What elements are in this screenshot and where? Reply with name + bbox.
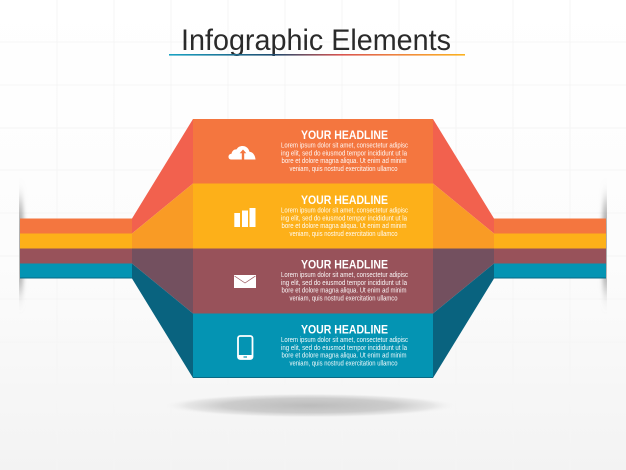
title underline: [169, 54, 465, 56]
icon: cloud upload: [228, 146, 256, 160]
right band fold shadow: [602, 198, 610, 294]
panel 4: teal: [193, 314, 433, 378]
body text 4: ing elit, sed do eiusmod tempor incididunt ut la: [281, 345, 407, 352]
body text 2: [281, 208, 408, 238]
body text 4: [281, 337, 408, 367]
body text 2: veniam, quis nostrud exercitation ullamco: [290, 231, 398, 238]
body text 3: veniam, quis nostrud exercitation ullamco: [290, 295, 398, 302]
left angled folds: [132, 119, 193, 378]
body text 1: bore et dolore magna aliqua. Ut enim ad minim: [282, 158, 407, 165]
icon: smartphone: [238, 336, 252, 359]
headline 2: YOUR HEADLINE: [301, 195, 388, 207]
body text 3: Lorem ipsum dolor sit amet, consectetur adipisc: [281, 272, 408, 279]
body text 4: veniam, quis nostrud exercitation ullamco: [290, 360, 398, 367]
panel 2: yellow: [193, 184, 433, 248]
panel 3: maroon: [193, 248, 433, 314]
icon: envelope: [234, 275, 256, 288]
ground shadow: [165, 394, 455, 418]
body text 2: ing elit, sed do eiusmod tempor incididunt ut la: [281, 215, 407, 222]
headline 3: YOUR HEADLINE: [301, 260, 388, 272]
body text 4: Lorem ipsum dolor sit amet, consectetur adipisc: [281, 337, 408, 344]
body text 3: [281, 272, 408, 302]
right ribbon bands: [494, 218, 606, 278]
body text 1: [281, 143, 408, 173]
panel 1: orange: [193, 119, 433, 184]
body text 1: ing elit, sed do eiusmod tempor incididunt ut la: [281, 150, 407, 157]
headline 1: YOUR HEADLINE: [301, 130, 388, 142]
right angled folds: [433, 119, 494, 378]
body text 4: bore et dolore magna aliqua. Ut enim ad minim: [282, 353, 407, 360]
title: Infographic Elements: [181, 24, 451, 57]
body text 3: ing elit, sed do eiusmod tempor incididunt ut la: [281, 280, 407, 287]
icon: bar chart: [234, 208, 256, 227]
left band fold shadow: [16, 198, 24, 294]
body text 1: veniam, quis nostrud exercitation ullamco: [290, 166, 398, 173]
left ribbon bands: [20, 218, 132, 278]
headline 4: YOUR HEADLINE: [301, 324, 388, 336]
body text 3: bore et dolore magna aliqua. Ut enim ad minim: [282, 288, 407, 295]
body text 2: Lorem ipsum dolor sit amet, consectetur adipisc: [281, 208, 408, 215]
body text 1: Lorem ipsum dolor sit amet, consectetur adipisc: [281, 143, 408, 150]
body text 2: bore et dolore magna aliqua. Ut enim ad minim: [282, 223, 407, 230]
